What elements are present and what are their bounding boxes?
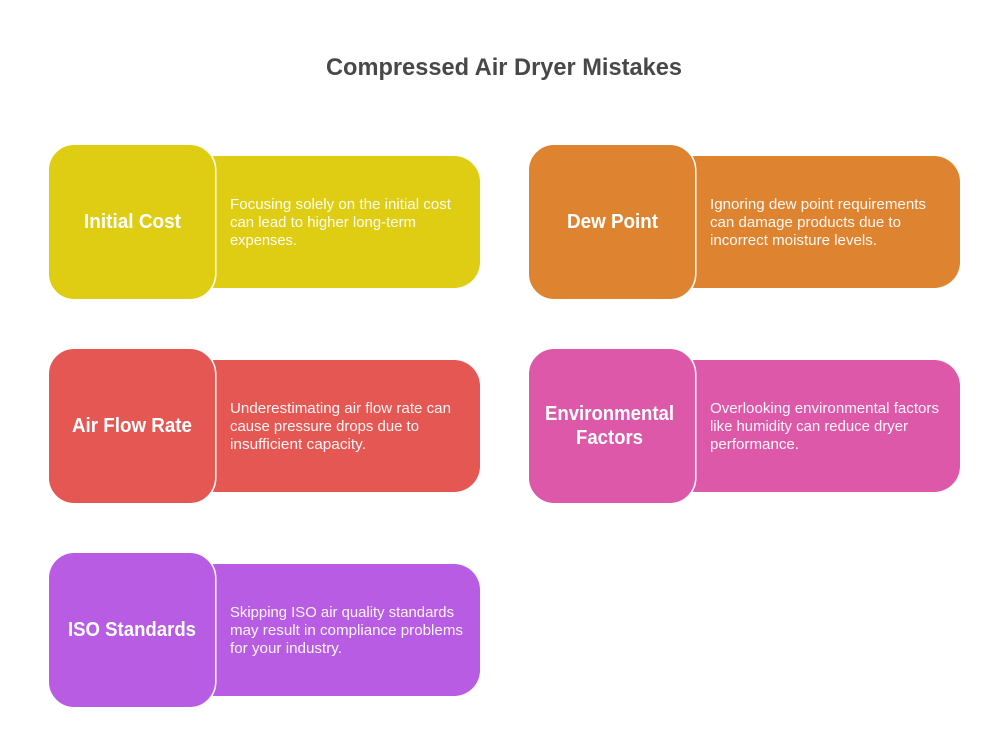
text: air flow rate description: Underestimating air flow rate can: [230, 400, 451, 417]
text: environmental factors description: performance.: [710, 436, 799, 453]
text: iso standards description: [230, 604, 463, 657]
text: dew point description: incorrect moisture levels.: [710, 232, 877, 249]
panel: dew point: [528, 144, 960, 300]
text: initial cost description: [230, 196, 452, 249]
text: dew point description: can damage products due to: [710, 214, 901, 231]
text: dew point description: [710, 196, 926, 249]
description box: iso standards: [190, 564, 480, 696]
text: initial cost description: can lead to higher long-term: [230, 214, 416, 231]
description box: dew point: [670, 156, 960, 288]
text: iso standards description: may result in compliance problems: [230, 622, 463, 639]
description box: initial cost: [190, 156, 480, 288]
heading: air flow rate: Air Flow Rate: [72, 415, 192, 437]
description box: environmental factors: [670, 360, 960, 492]
text: environmental factors description: Overlooking environmental factors: [710, 400, 939, 417]
description box: air flow rate: [190, 360, 480, 492]
heading: iso standards: ISO Standards: [68, 619, 196, 641]
text: air flow rate description: insufficient capacity.: [230, 436, 366, 453]
label tab: iso standards: [48, 552, 216, 708]
label tab: environmental factors: [528, 348, 696, 504]
label tab: initial cost: [48, 144, 216, 300]
title: Compressed Air Dryer Mistakes: [326, 54, 682, 81]
label tab: air flow rate: [48, 348, 216, 504]
text: air flow rate description: [230, 400, 451, 453]
panel: initial cost: [48, 144, 480, 300]
panel: iso standards: [48, 552, 480, 708]
text: iso standards description: for your industry.: [230, 640, 342, 657]
label tab: dew point: [528, 144, 696, 300]
text: environmental factors description: [710, 400, 939, 453]
heading: environmental factors: [545, 403, 674, 449]
heading: environmental factors: Environmental: [545, 403, 674, 425]
panel: environmental factors: [528, 348, 960, 504]
text: initial cost description: Focusing solely on the initial cost: [230, 196, 452, 213]
heading: dew point: Dew Point: [567, 211, 658, 233]
heading: environmental factors: Factors: [576, 427, 643, 449]
panel: air flow rate: [48, 348, 480, 504]
heading: initial cost: Initial Cost: [84, 211, 181, 233]
text: air flow rate description: cause pressure drops due to: [230, 418, 419, 435]
text: dew point description: Ignoring dew point requirements: [710, 196, 926, 213]
text: environmental factors description: like humidity can reduce dryer: [710, 418, 908, 435]
text: iso standards description: Skipping ISO air quality standards: [230, 604, 454, 621]
text: initial cost description: expenses.: [230, 232, 297, 249]
